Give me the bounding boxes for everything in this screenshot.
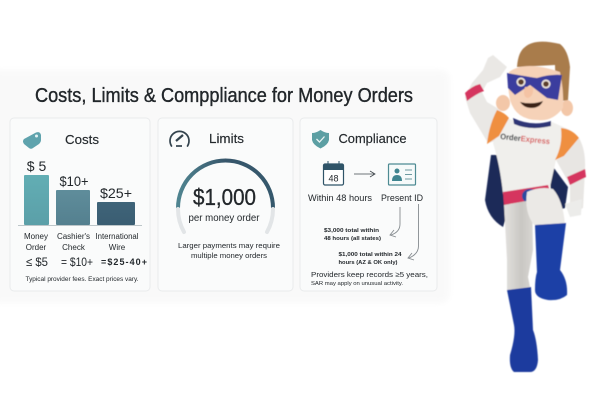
standing leg (504, 200, 533, 290)
mascot (465, 42, 586, 372)
shoulder: right (555, 128, 579, 160)
belt buckle (522, 189, 538, 203)
logo text: OrderExpress (500, 132, 551, 146)
note: 1,000 rule: $1,000 total within 24 (338, 252, 403, 258)
hair (517, 42, 570, 102)
raised arm (465, 55, 507, 143)
raised thigh (526, 188, 565, 225)
wrist band (465, 84, 484, 101)
raised boot (535, 223, 567, 300)
note: typical fees: Typical provider fees. Exact prices vary. (26, 276, 139, 283)
icon: calendar: 48 (328, 174, 339, 184)
arrow: to 1,000 rule (408, 204, 418, 260)
label: money order: Order (26, 243, 47, 252)
panel: costs (10, 118, 150, 291)
arm band (567, 169, 586, 185)
note: 1,000 rule: hours (AZ & OK only) (338, 260, 398, 266)
value: international wire fee: =$25-40+ (101, 257, 147, 267)
arrow: to 3,000 rule (390, 207, 400, 237)
nose (524, 87, 533, 98)
arrow: to present ID (354, 171, 375, 177)
note: record keeping: Providers keep records ≥5 years, (311, 270, 428, 279)
icon: calendar (324, 161, 344, 185)
note: larger payments: multiple money orders (191, 251, 267, 260)
bar: cashier's check: $10+ (60, 173, 88, 189)
bar: money order: $ 5 (27, 158, 46, 174)
eyes (516, 78, 550, 88)
icon: ID card (388, 164, 416, 185)
bar chart (18, 158, 142, 226)
note: SAR: SAR may apply on unusual activity. (311, 281, 403, 287)
icon: shield (312, 130, 329, 148)
collar (513, 118, 551, 128)
torso (493, 118, 570, 194)
shoulder: left (487, 110, 509, 144)
note: 3,000 rule: 48 hours (all states) (324, 236, 381, 242)
label: present ID: Present ID (381, 193, 423, 203)
title: Costs, Limits & Comppliance for Money Orders (35, 85, 413, 107)
label: cashier's check: Cashier's (57, 232, 90, 241)
icon: price tag (23, 132, 41, 149)
right arm (556, 138, 585, 214)
standing boot (507, 287, 538, 372)
smile (520, 101, 543, 108)
gauge arc (178, 161, 273, 232)
value: cashier's check fee: = $10+ (61, 255, 93, 269)
value: $1,000: $1,000 (193, 184, 256, 210)
hand (565, 199, 582, 217)
panel: limits (158, 118, 293, 291)
belt (503, 185, 552, 205)
face (508, 66, 563, 120)
bar: international wire: $25+ (100, 185, 132, 201)
value: money order fee: ≤ $5 (26, 255, 48, 269)
heading: compliance: Compliance (338, 132, 407, 146)
heading: limits: Limits (209, 132, 244, 146)
label: international wire: Wire (109, 243, 126, 252)
label: international wire: International (96, 232, 139, 241)
note: larger payments: Larger payments may require (178, 241, 280, 250)
label: per money order: per money order (188, 213, 260, 224)
note: 3,000 rule: $3,000 total within (324, 228, 380, 234)
label: money order: Money (24, 232, 48, 241)
cape (485, 155, 568, 227)
panel: compliance (300, 118, 437, 291)
icon: speedometer (170, 131, 189, 146)
heading: costs: Costs (65, 133, 99, 147)
mask (507, 73, 562, 100)
label: within 48 hours: Within 48 hours (308, 193, 373, 203)
background panel (0, 70, 450, 303)
label: cashier's check: Check (62, 243, 86, 252)
ears (496, 95, 573, 116)
